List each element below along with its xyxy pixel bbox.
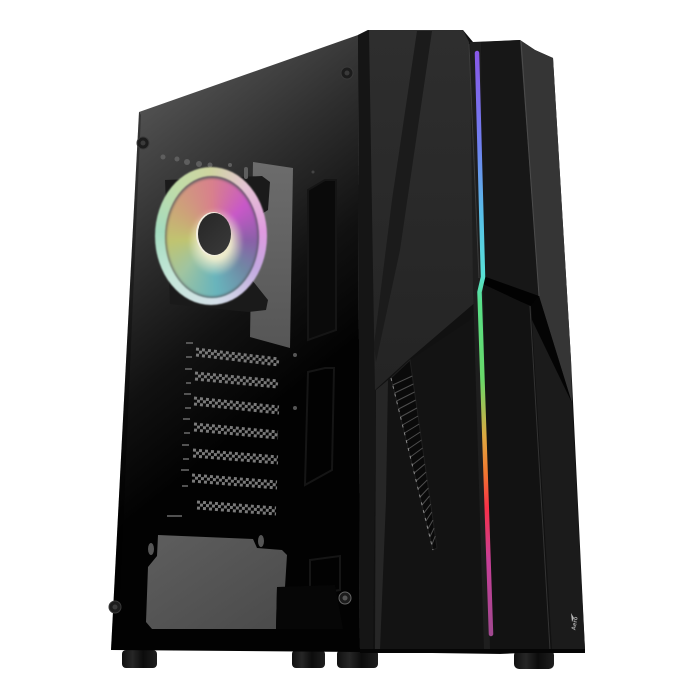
right side facet bbox=[520, 40, 572, 403]
glass screws bbox=[109, 67, 353, 613]
fan outer ring bbox=[155, 167, 267, 305]
fan inner shadow ring bbox=[165, 176, 259, 298]
base shadow bbox=[360, 649, 585, 653]
rgb light strip bbox=[477, 53, 491, 634]
lower-left panel bbox=[376, 302, 485, 650]
front panel bbox=[358, 30, 585, 654]
side vent bbox=[391, 360, 437, 550]
lower-left lighter sliver bbox=[375, 380, 388, 650]
panel highlight lines bbox=[469, 41, 550, 650]
motherboard cutout bbox=[250, 162, 293, 348]
logo: Aero bbox=[571, 616, 580, 631]
feet bbox=[122, 650, 554, 669]
black wedge bbox=[531, 296, 572, 403]
fan hub hole bbox=[198, 213, 231, 255]
fan mount bbox=[165, 176, 270, 312]
black notch bbox=[481, 276, 539, 306]
fan blade disc bbox=[166, 178, 258, 297]
front base silhouette bbox=[358, 30, 585, 654]
central strip channel bbox=[470, 42, 493, 650]
slot tabs bbox=[167, 343, 193, 516]
psu shroud block bbox=[276, 585, 343, 629]
lower-right panel bbox=[483, 284, 550, 650]
tempered glass side panel bbox=[109, 35, 360, 652]
drive bay outline bbox=[305, 180, 340, 595]
power supply opening bbox=[146, 535, 287, 629]
upper-left faceted panel bbox=[369, 30, 479, 390]
diagonal dark stripe bbox=[374, 31, 432, 362]
expansion slot perforations bbox=[192, 349, 279, 514]
psu mounting holes bbox=[148, 535, 264, 555]
far-right lower panel bbox=[532, 320, 585, 650]
mounting dots bbox=[160, 154, 314, 410]
upper-right dark panel bbox=[481, 40, 539, 306]
corner edge bbox=[358, 30, 376, 652]
